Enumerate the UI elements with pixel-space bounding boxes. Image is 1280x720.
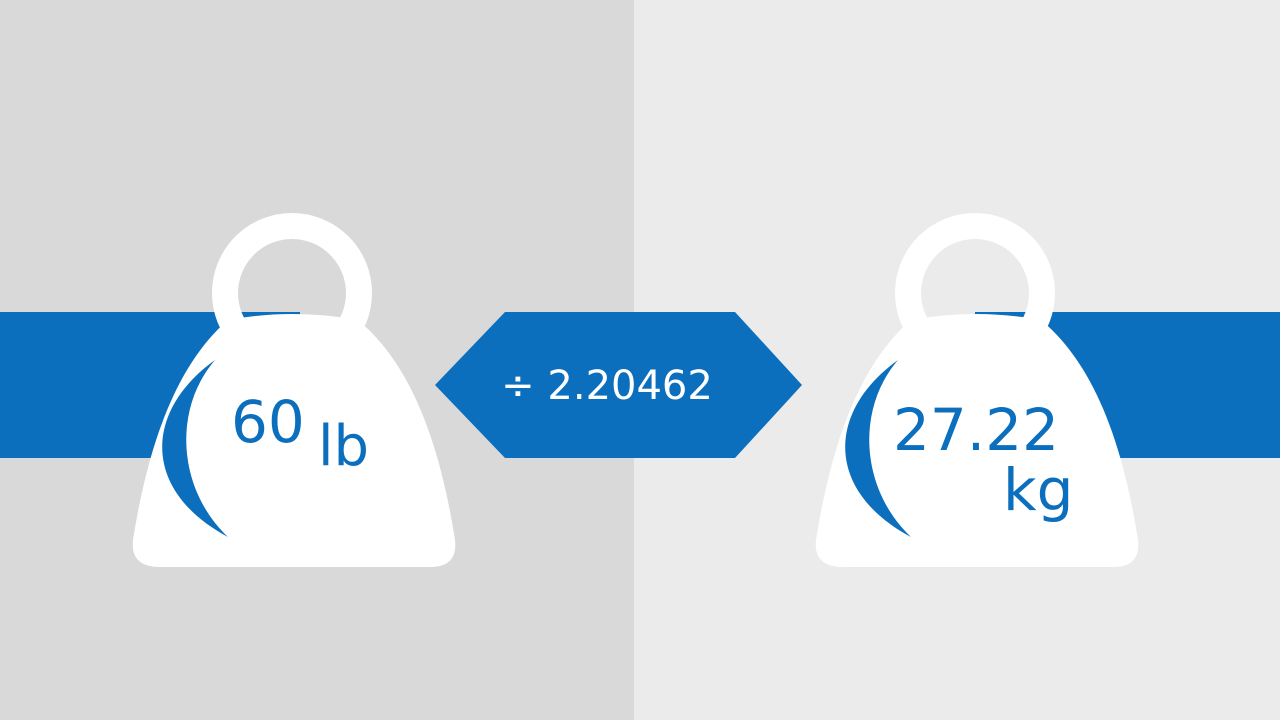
blue band right bbox=[975, 312, 1280, 458]
blue band left bbox=[0, 312, 300, 458]
weight: 27.22 kg: 27.22 bbox=[893, 396, 1059, 464]
weight: 60 lb bbox=[133, 226, 455, 567]
conversion hexagon: ÷ 2.20462 bbox=[501, 363, 713, 409]
weight: 60 lb: lb bbox=[318, 414, 369, 479]
weight: 60 lb: 60 bbox=[231, 388, 305, 456]
weight: 27.22 kg: kg bbox=[1003, 456, 1073, 524]
conversion hexagon bbox=[435, 312, 802, 458]
weight: 27.22 kg bbox=[816, 226, 1138, 567]
